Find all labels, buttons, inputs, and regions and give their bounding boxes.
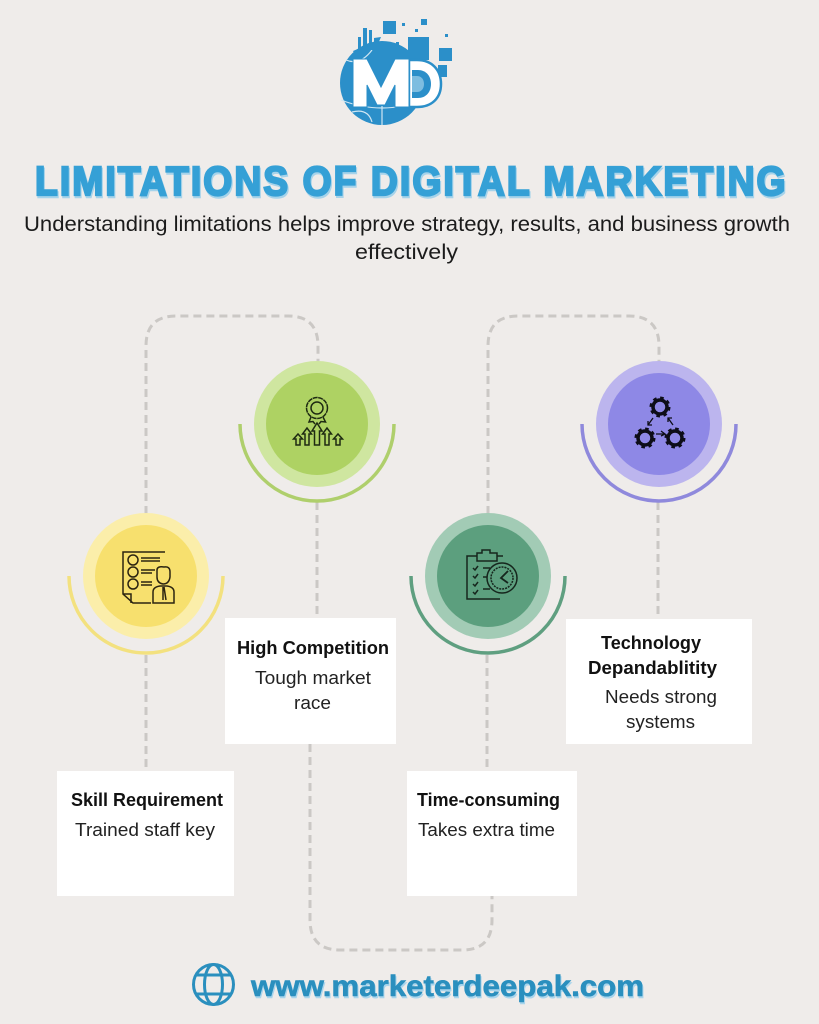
- logo: MD globe: [340, 19, 452, 125]
- dashed connector path: [146, 316, 659, 950]
- card: time-consuming: Takes extra time: [418, 820, 555, 840]
- subtitle: effectively: [355, 241, 459, 264]
- card: technology dependability: Technology: [601, 633, 701, 653]
- card: technology dependability: [566, 619, 752, 744]
- subtitle: [24, 213, 790, 264]
- icon: website globe: [194, 964, 234, 1004]
- card: technology dependability: Depandablitity: [588, 658, 717, 678]
- card: time-consuming: [407, 771, 577, 896]
- step 2: high competition node: [240, 361, 394, 501]
- card: high competition: High Competition: [237, 638, 389, 658]
- step 1: skill requirement node: [69, 513, 223, 653]
- card: high competition: Tough market: [255, 668, 371, 688]
- website url: www.marketerdeepak.com: [251, 972, 645, 1005]
- icon: three gears: [636, 398, 684, 447]
- card: high competition: [225, 618, 396, 744]
- icon: clipboard and clock: [467, 550, 517, 599]
- icon: award and arrows: [294, 398, 342, 445]
- card: skill requirement: Skill Requirement: [71, 790, 223, 810]
- card: technology dependability: Needs strong: [605, 687, 717, 707]
- card: time-consuming: Time-consuming: [417, 790, 560, 810]
- step 3: time-consuming node: [411, 513, 565, 653]
- subtitle: Understanding limitations helps improve strategy, results, and business growth: [24, 213, 790, 236]
- title: LIMITATIONS OF DIGITAL MARKETING: [35, 158, 786, 204]
- title: LIMITATIONS OF DIGITAL MARKETING: [36, 160, 787, 206]
- card: technology dependability: systems: [626, 712, 695, 732]
- icon: checklist and person: [123, 552, 174, 603]
- card: high competition: race: [294, 693, 331, 713]
- website url: www.marketerdeepak.com: [250, 970, 644, 1003]
- step 4: technology dependability node: [582, 361, 736, 501]
- card: skill requirement: [57, 771, 234, 896]
- card: skill requirement: Trained staff key: [75, 820, 215, 840]
